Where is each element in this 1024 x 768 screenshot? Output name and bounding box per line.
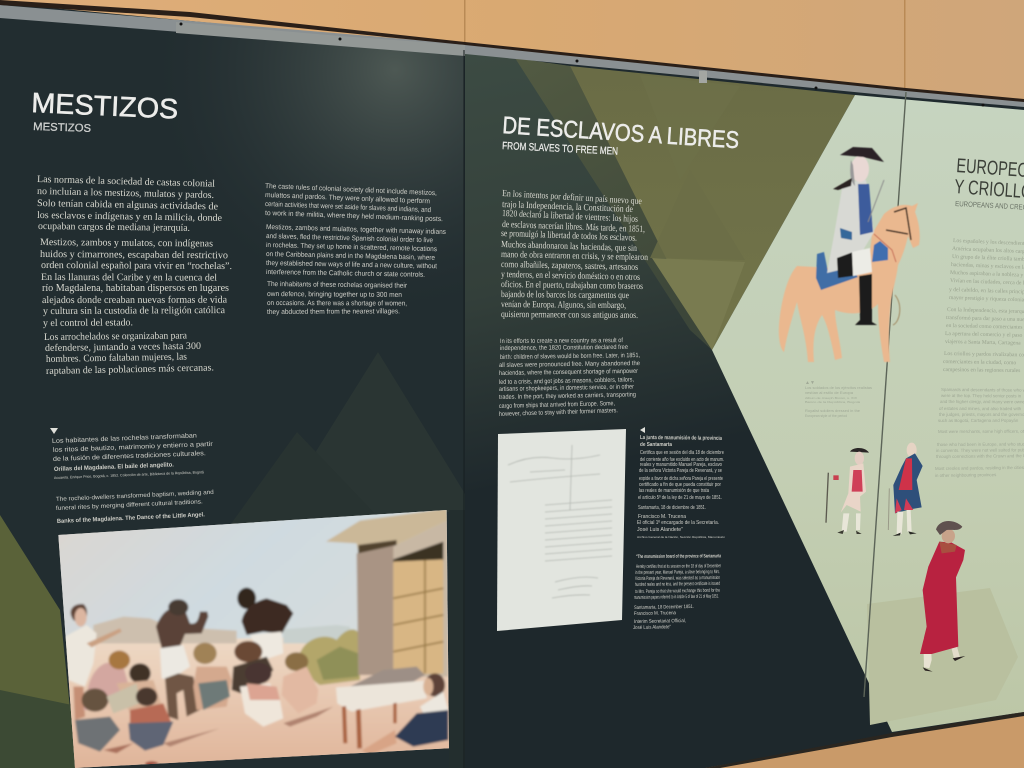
text block: painting caption: Banks of the Magdalena. The Dance of the Little Angel. (57, 512, 205, 525)
text block: Mestizos Spanish: ocupaban cargos de mediana jerarquía. (38, 221, 190, 234)
text block: document caption Spanish: reales y manumitido Manuel Pareja, esclavo (640, 462, 722, 468)
text block: painting caption: Acuarela. Enrique Price, Bogotá, c. 1852. Colección de arte, Biblioteca de la República, Bogotá (54, 470, 204, 480)
text block: De esclavos Spanish: quisieron permanecer con sus antiguos amos. (501, 310, 638, 321)
illustration: man in red cloak (920, 521, 965, 672)
text block: De esclavos English: led to a crisis, and got jobs as masons, cobblers, tailors, (499, 376, 634, 386)
text block: painting caption: The rochelo-dwellers transformed baptism, wedding and (56, 490, 214, 503)
text block: document caption English: “The manumission board of the province of Santamarta (636, 553, 721, 560)
text block: Europeos Spanish: campesinos en las regiones rurales (943, 367, 1020, 374)
text block: document caption Spanish: del corriente año fue excluido en acto de manum. (640, 457, 724, 463)
text block: De esclavos Spanish (501, 188, 648, 321)
text block: Mestizos Spanish: En las llanuras del Caribe y en la cuenca del (41, 272, 217, 284)
text block: Europeos English: such as Bogotá, Cartagena and Popayán (938, 418, 1019, 423)
text block: document caption English: Francisco M. Trucena (634, 610, 676, 617)
icon: caption marker triangle (50, 428, 58, 434)
saddle and breeches (837, 252, 853, 278)
text block: Mestizos English: they abducted them from the nearest villages. (267, 308, 400, 316)
text block: De esclavos Spanish: trajo la Independencia, la Constitución de (502, 200, 633, 215)
text block: document caption English: Victoria Pareja de Revenará, was selected as a manumission (635, 575, 720, 582)
text block: document caption Spanish: Archivo General de la Nación, Sección República, Manumisión (637, 535, 725, 539)
panel: pale green right background (712, 95, 1024, 732)
rider hat (840, 147, 884, 162)
text block: Mestizos Spanish: Los arrochelados se organizaban para (44, 330, 188, 343)
text block: Mestizos Spanish: orden colonial español para vivir en “rochelas”. (41, 260, 232, 272)
text block: rider caption: vestían al estilo de Europa (805, 391, 853, 395)
text block: document caption Spanish: expide a favor de dicha señora Pareja el presente (639, 476, 723, 482)
text block: Mestizos Spanish: los esclavos e indígenas y en la milicia, donde (37, 210, 223, 224)
text block: Mestizos Spanish: defenderse, juntando a veces hasta 300 (45, 341, 201, 354)
text block: Mestizos English: they established new ways of life and a new culture, without (266, 260, 437, 270)
text block: rider caption: Banco de la República, Bogotá (805, 400, 861, 404)
text block: Mestizos English: on occasions. As there was a shortage of women, (267, 300, 407, 307)
text block: Mestizos English: mulattos and pardos. They were only allowed to perform (265, 192, 430, 205)
panel join line (464, 50, 906, 768)
text block: Europeos Spanish (943, 238, 1024, 374)
text block: document caption English: Santamarta, 18 December 1851. (634, 604, 694, 611)
text block: Mestizos Spanish: Solo tenían cabida en algunas actividades de (37, 198, 219, 212)
text block: Mestizos Spanish: no incluían a los mestizos, mulatos y pardos. (37, 186, 214, 201)
text block: De esclavos Spanish: de esclavos nacerían libres. Más tarde, en 1851, (502, 220, 645, 235)
text block: Mestizos English: The inhabitants of these rochelas organised their (267, 281, 408, 290)
rider vest (858, 184, 873, 235)
text block: De esclavos Spanish: mano de obra entraron en crisis, y se emplearon (501, 250, 648, 263)
text block: document caption Spanish: José Luis Alandete” (637, 527, 683, 533)
top metal rail (0, 0, 1024, 107)
text block: Mestizos Spanish: Mestizos, zambos y mulatos, con indígenas (40, 237, 213, 250)
text block: De esclavos English: cargo from ships that arrived from Europe. Some, (499, 400, 615, 410)
text block: Mestizos Spanish: río Magdalena, habitaban dispersos en lugares (42, 283, 229, 294)
text block: De esclavos Spanish: y tenderos, en el servicio doméstico o en otros (501, 270, 640, 283)
text block: document caption English: to Mrs. Pareja so that she would exchange this bond for the (635, 588, 720, 595)
text block: De esclavos English: haciendas, where the consequent shortage of manpower (499, 368, 639, 377)
text block: De esclavos English: birth: children of slaves would be born free. Later, in 1851, (500, 352, 640, 361)
text block: De esclavos Spanish: como albañiles, zapateros, sastres, artesanos (501, 260, 638, 273)
text block: document caption Spanish: Certifica que en sesión del día 18 de diciembre (640, 450, 724, 456)
text block: Mestizos English: interference from the Catholic church or state controls. (266, 269, 425, 279)
text block: document caption English: manumission papers referred to in Article 5 of law of 21 of May 1851. (634, 594, 719, 601)
text block: Mestizos Spanish: raptaban de las poblaciones más cercanas. (46, 362, 214, 377)
text block: Mestizos Spanish: y el control del estado. (43, 317, 133, 329)
text block: document caption Spanish: certificado a fin de que pueda constituir por (639, 482, 721, 488)
text block: document caption Spanish: de la señora Victoria Pareja de Revenará, y se (639, 468, 722, 474)
text block: Europeos English: were at the top. They held senior posts in (941, 393, 1022, 398)
text block: document caption English: Hereby certifies that at its session on the 18 of day of December (636, 563, 721, 570)
text block: Europeos English: in other neighbouring provinces (935, 472, 997, 478)
text block: Mestizos Spanish: y cultura sin la custodia de la religión católica (43, 305, 226, 317)
painting: The Dance of the Little Angel (50, 503, 460, 768)
text block: Mestizos Spanish: hombres. Como faltaban mujeres, las (46, 352, 187, 365)
panel: middle background with olive triangles (465, 52, 892, 768)
text block: rider caption: ▲▼ (805, 380, 815, 386)
text block: De esclavos English: artisans or shopkeepers, in domestic service, or in other (499, 383, 635, 393)
heading: Mestizos: MESTIZOS (33, 121, 91, 135)
rider ponytail (833, 178, 852, 190)
text block: document caption Spanish: El oficial 1º encargado de la Secretaría. (637, 519, 719, 526)
heading: Europeos y criollos (954, 155, 1024, 212)
text block: document caption Spanish (637, 435, 725, 539)
text block: painting caption: los ritos de bautizo, matrimonio y entierro a partir (53, 441, 214, 454)
text block: document caption Spanish: de Santamarta (640, 442, 673, 448)
text block: document caption Spanish: La junta de manumisión de la provincia (640, 435, 723, 442)
text block: rider caption (805, 380, 872, 418)
text block: Mestizos English: in rochelas. They set up home in scattered, remote locations (266, 242, 438, 253)
text block: document caption English: in the present year, Manuel Pareja, a slave belonging to Mrs. (635, 569, 720, 576)
illustration: gentleman in blue coat (888, 443, 923, 536)
text block: painting caption: Los habitantes de las rochelas transformaban (52, 432, 197, 445)
text block: rider caption: Album de Joseph Brown, s. XIX (805, 396, 857, 400)
text block: Mestizos English: The caste rules of colonial society did not include mestizos, (265, 183, 437, 197)
text block: Mestizos Spanish: alejados donde creaban nuevas formas de vida (42, 295, 228, 306)
text block: document caption Spanish: Francisco M. Trucena (638, 514, 687, 520)
text block: rider caption: European style of the period (805, 414, 847, 418)
text block: Europeos English: of estates and mines, and also traded with (939, 406, 1022, 411)
text block: De esclavos Spanish: 1820 declaró la libertad de vientres: los hijos (502, 209, 638, 225)
text block: document caption Spanish: Santamarta, 18 de diciembre de 1851. (638, 505, 706, 511)
rider cuff (840, 228, 852, 240)
text block: De esclavos Spanish: oficios. En el puerto, trabajaban como braseros (501, 279, 643, 292)
text block: document caption English: Interim Secretariat Official, (634, 618, 686, 625)
text block: De esclavos English: all slaves were pronounced free. Many abandoned the (499, 360, 640, 369)
heading: Mestizos: MESTIZOS (31, 87, 179, 125)
text block: De esclavos Spanish: En los intentos por definir un país nuevo que (502, 188, 642, 207)
text block: document caption English (633, 553, 721, 631)
text block: document caption Spanish: el artículo 5º de la ley de 21 de mayo de 1851. (638, 494, 722, 501)
text block: De esclavos English: independence, the 1820 Constitution declared free (500, 344, 628, 352)
text block: Mestizos English: own defence, bringing together up to 300 men (267, 291, 402, 299)
lower panel edge (705, 712, 1024, 768)
rider coat (827, 180, 874, 273)
text block: Europeos English (935, 387, 1024, 478)
text block: De esclavos Spanish: Muchos abandonaron las haciendas, que sin (501, 240, 637, 254)
text block: document caption Spanish: las reales de manumisión de que trata (639, 488, 710, 494)
text block: De esclavos English: trades. In the port, they worked as carriers, transporting (499, 391, 636, 401)
text block: Mestizos Spanish (37, 174, 232, 377)
horse (779, 203, 920, 362)
text block: Mestizos English (265, 183, 447, 316)
text block: De esclavos Spanish: venían de Europa. Algunos, sin embargo, (501, 300, 626, 311)
illustration: officer with pike (826, 448, 869, 534)
icon: document caption marker (640, 427, 645, 433)
text block: De esclavos English: In its efforts to create a new country as a result of (500, 337, 623, 345)
heading: De esclavos a libres: FROM SLAVES TO FREE MEN (502, 140, 618, 158)
rider boot (855, 274, 877, 325)
document: manumission certificate (497, 429, 626, 631)
text block: Europeos English: Most creoles and pardos, residing in the cities (935, 465, 1024, 471)
text block: De esclavos English: however, chose to stay with their former masters. (499, 407, 618, 418)
text block: rider caption: Los soldados de los ejércitos realistas (805, 386, 872, 390)
text block: Mestizos English: certain activities that were set aside for slaves and indians, and (265, 201, 431, 214)
text block: rider caption: Royalist soldiers dressed in the (805, 409, 860, 413)
text block: Mestizos English: to work in the militia, where they held medium-ranking posts. (265, 210, 443, 223)
text block: Mestizos Spanish: huidos y cimarrones, escapaban del restrictivo (40, 249, 228, 261)
rider sword (868, 180, 884, 222)
illustration: horse and rider (779, 147, 920, 362)
panel: left background shading and triangles (0, 16, 475, 768)
text block: Mestizos English: and slaves, fled the restrictive Spanish colonial order to live (266, 233, 433, 244)
text block: Europeos Spanish: comerciantes en la ciudad, como (943, 359, 1016, 366)
text block: De esclavos Spanish: se promulgó la libertad de todos los esclavos. (501, 229, 637, 244)
text block: painting caption (52, 432, 214, 525)
text block: document caption English: hundred reales and no less, and the present certificate is issued (635, 581, 720, 588)
text block: painting caption: Orillas del Magdalena. El baile del angelito. (54, 461, 174, 473)
text block: Mestizos English: on the Caribbean plains and in the Magdalena basin, where (266, 251, 435, 262)
text block: painting caption: de la fusión de diferentes tradiciones culturales. (53, 450, 206, 463)
text block: Europeos Spanish: mayor prestigio y riqueza colonial (949, 295, 1024, 303)
text block: Europeos Spanish: viajeros a Santa Marta, Cartagena (945, 339, 1021, 347)
text block: Mestizos English: Mestizos, zambos and mulattos, together with runaway indians (266, 224, 447, 236)
text block: document caption English: José Luis Alandete” (633, 624, 671, 631)
saddle cloth (816, 252, 858, 290)
saddle holster (872, 241, 888, 262)
rider head (851, 156, 869, 182)
heading: De esclavos a libres: DE ESCLAVOS A LIBRES (502, 112, 740, 154)
text block: De esclavos English (499, 337, 640, 418)
text block: De esclavos Spanish: bajando de los barcos los cargamentos que (501, 290, 629, 301)
text block: painting caption: funeral rites by merging different cultural traditions. (56, 499, 203, 512)
text block: Mestizos Spanish: Las normas de la sociedad de castas colonial (37, 174, 215, 190)
